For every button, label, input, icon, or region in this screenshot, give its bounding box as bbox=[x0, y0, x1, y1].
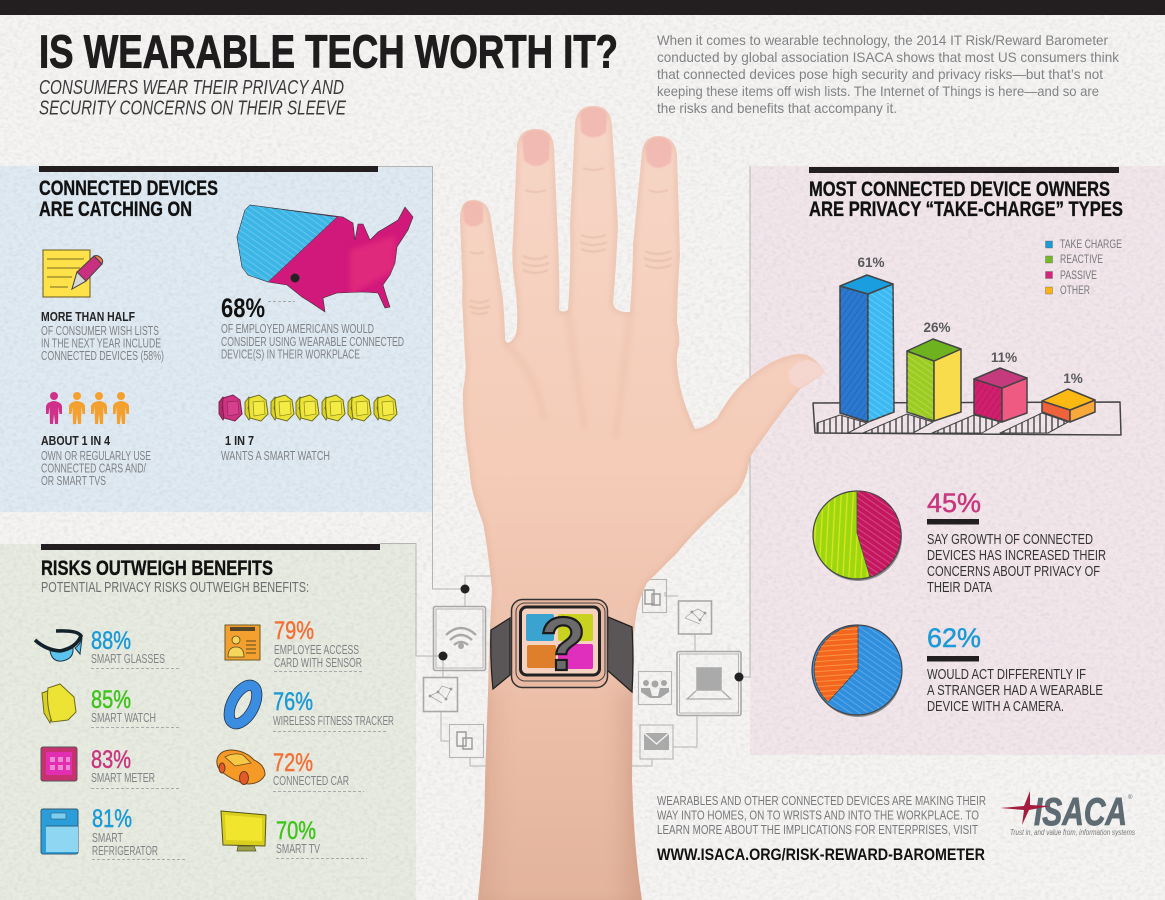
subtitle: SECURITY CONCERNS ON THEIR SLEEVE bbox=[39, 98, 346, 120]
item: wireless fitness tracker: 76% bbox=[273, 688, 313, 716]
icon: documents box bbox=[450, 724, 484, 758]
bar: 1 percent bbox=[1042, 389, 1095, 422]
icon: four people bbox=[46, 392, 129, 424]
text: 62 percent: WOULD ACT DIFFERENTLY IF bbox=[927, 667, 1086, 683]
text: 1 in 7 bbox=[221, 433, 330, 463]
ISACA logo: ISACA bbox=[1034, 791, 1127, 834]
heading: RISKS OUTWEIGH BENEFITS bbox=[41, 557, 273, 580]
watch strap bbox=[491, 617, 633, 692]
intro paragraph: When it comes to wearable technology, the 2014 IT Risk/Reward Barometer bbox=[657, 32, 1108, 48]
item: employee access card bbox=[225, 617, 364, 672]
item: smart TV bbox=[221, 811, 367, 858]
bar labels: 1% bbox=[1063, 371, 1083, 386]
chart legend: OTHER bbox=[1060, 283, 1090, 297]
section rule bbox=[39, 166, 378, 172]
item: connected car: CONNECTED CAR bbox=[273, 774, 349, 788]
bar labels: 61% bbox=[857, 255, 885, 270]
section rule bbox=[41, 544, 380, 550]
text: 62 percent bbox=[927, 623, 1103, 715]
item: smart watch: 85% bbox=[91, 686, 131, 714]
top black bar bbox=[0, 0, 1165, 15]
panel: risks background bbox=[0, 544, 416, 900]
item: smart refrigerator: REFRIGERATOR bbox=[92, 844, 158, 858]
intro paragraph: the risks and benefits that accompany it. bbox=[657, 100, 897, 116]
text: about 1 in 4: OWN OR REGULARLY USE bbox=[41, 449, 151, 463]
text: 45 percent: DEVICES HAS INCREASED THEIR bbox=[927, 548, 1106, 564]
text: 68 percent: CONSIDER USING WEARABLE CONNECTED bbox=[221, 335, 404, 349]
text: about 1 in 4 bbox=[41, 433, 151, 488]
item: smart refrigerator bbox=[41, 805, 186, 860]
pie chart: 45 percent bbox=[813, 491, 902, 581]
heading bbox=[809, 178, 1123, 221]
text: about 1 in 4: OR SMART TVS bbox=[41, 474, 106, 488]
bar: 61 percent bbox=[840, 275, 894, 422]
item: smart glasses: 88% bbox=[91, 627, 131, 655]
icon: laptop box bbox=[677, 652, 741, 716]
fingernails bbox=[463, 107, 825, 388]
item: smart glasses: SMART GLASSES bbox=[91, 652, 165, 666]
item: smart glasses bbox=[35, 627, 181, 668]
heading: ARE CATCHING ON bbox=[39, 198, 192, 221]
item: employee access card: 79% bbox=[274, 617, 314, 645]
bar labels: 11% bbox=[991, 350, 1017, 365]
text: 1 in 7: WANTS A SMART WATCH bbox=[221, 449, 330, 463]
intro paragraph: keeping these items off wish lists. The Internet of Things is here—and so are bbox=[657, 83, 1099, 99]
text: about 1 in 4: CONNECTED CARS AND/ bbox=[41, 462, 146, 476]
title block bbox=[39, 26, 618, 120]
footer text: WEARABLES AND OTHER CONNECTED DEVICES ARE MAKING THEIR bbox=[657, 793, 986, 808]
url: WWW.ISACA.ORG/RISK-REWARD-BAROMETER bbox=[657, 845, 985, 864]
text: 45 percent bbox=[927, 488, 1106, 596]
text: more than half: MORE THAN HALF bbox=[41, 309, 135, 324]
ISACA logo: ® bbox=[1128, 794, 1133, 801]
bar: 26 percent bbox=[907, 339, 961, 421]
chart legend: REACTIVE bbox=[1060, 252, 1103, 266]
bar labels bbox=[857, 255, 1083, 386]
illustration: smart watch with question mark bbox=[491, 600, 633, 692]
connector diagram and device boxes bbox=[378, 166, 750, 766]
intro paragraph: conducted by global association ISACA shows that most US consumers think bbox=[657, 49, 1120, 65]
intro paragraph: that connected devices pose high security and privacy risks—but that’s not bbox=[657, 66, 1103, 82]
panel: connected devices bbox=[39, 166, 413, 488]
bar: 11 percent bbox=[974, 368, 1027, 422]
item: wireless fitness tracker bbox=[223, 681, 394, 732]
ISACA logo bbox=[1000, 791, 1135, 837]
footer text: LEARN MORE ABOUT THE IMPLICATIONS FOR ENTERPRISES, VISIT bbox=[657, 822, 978, 837]
text: 45 percent: SAY GROWTH OF CONNECTED bbox=[927, 532, 1093, 548]
item: smart refrigerator: 81% bbox=[92, 805, 132, 833]
question mark: ? bbox=[540, 602, 586, 687]
item: smart TV: 70% bbox=[276, 817, 316, 845]
icon: note and pencil bbox=[43, 250, 103, 297]
pie chart: 62 percent bbox=[812, 625, 902, 717]
text: more than half: CONNECTED DEVICES (58%) bbox=[41, 349, 164, 363]
subtitle bbox=[39, 77, 346, 120]
item: smart refrigerator: SMART bbox=[92, 831, 123, 845]
item: smart meter: SMART METER bbox=[91, 771, 155, 785]
icon: mail box bbox=[640, 725, 673, 759]
knuckle creases bbox=[469, 168, 672, 314]
icon: wifi box bbox=[434, 606, 486, 670]
text: about 1 in 4: ABOUT 1 IN 4 bbox=[41, 433, 111, 448]
text: 62 percent: A STRANGER HAD A WEARABLE bbox=[927, 683, 1103, 699]
icon: chat box bbox=[642, 580, 666, 612]
chart legend: TAKE CHARGE bbox=[1060, 237, 1122, 251]
connector dots bbox=[438, 584, 744, 682]
section rule bbox=[809, 167, 1119, 173]
item: smart TV: SMART TV bbox=[276, 842, 320, 856]
panel: privacy take-charge types bbox=[809, 167, 1123, 717]
footer text: WAY INTO HOMES, ON TO WRISTS AND INTO THE WORKPLACE. TO bbox=[657, 808, 979, 822]
subheading: POTENTIAL PRIVACY RISKS OUTWEIGH BENEFITS: bbox=[41, 579, 309, 596]
panel: risks outweigh benefits bbox=[35, 544, 394, 860]
icon: US map bbox=[237, 205, 413, 312]
watch case bbox=[512, 600, 608, 688]
intro paragraph bbox=[657, 32, 1120, 116]
heading bbox=[39, 177, 218, 221]
icon: seven watches bbox=[219, 395, 397, 421]
item: smart watch: SMART WATCH bbox=[91, 711, 156, 725]
footer text bbox=[657, 793, 986, 864]
text: 62 percent: DEVICE WITH A CAMERA. bbox=[927, 699, 1064, 715]
text: 45 percent: CONCERNS ABOUT PRIVACY OF bbox=[927, 564, 1100, 580]
item: smart meter: 83% bbox=[91, 746, 131, 774]
item: employee access card: CARD WITH SENSOR bbox=[274, 656, 362, 670]
text: more than half: OF CONSUMER WISH LISTS bbox=[41, 324, 159, 338]
title: IS WEARABLE TECH WORTH IT? bbox=[39, 26, 618, 78]
panel: privacy types background bbox=[750, 166, 1165, 755]
subtitle: CONSUMERS WEAR THEIR PRIVACY AND bbox=[39, 77, 344, 99]
ISACA logo: Trust in, and value from, information systems bbox=[1010, 828, 1135, 837]
text: 45 percent: THEIR DATA bbox=[927, 580, 992, 596]
text: more than half: IN THE NEXT YEAR INCLUDE bbox=[41, 336, 161, 350]
3D bar chart bbox=[813, 275, 1121, 435]
icon: network box right bbox=[678, 601, 712, 634]
item: wireless fitness tracker: WIRELESS FITNESS TRACKER bbox=[273, 714, 394, 728]
text: 1 in 7: 1 IN 7 bbox=[225, 433, 254, 448]
text: 68 percent: DEVICE(S) IN THEIR WORKPLACE bbox=[221, 348, 360, 362]
bar labels: 26% bbox=[923, 320, 951, 335]
illustration: hand bbox=[460, 106, 825, 900]
panel: connected devices background bbox=[0, 166, 433, 512]
watch screen quadrants bbox=[526, 614, 593, 669]
text: more than half bbox=[41, 309, 164, 363]
text: 62 percent: 62% bbox=[927, 623, 981, 653]
text: 68 percent: 68% bbox=[221, 293, 265, 323]
text: 68 percent bbox=[221, 293, 404, 362]
text: 45 percent: 45% bbox=[927, 488, 981, 518]
item: smart watch bbox=[42, 684, 181, 728]
icon: people box bbox=[638, 672, 672, 704]
item: connected car: 72% bbox=[273, 749, 313, 777]
chart legend bbox=[1046, 237, 1122, 297]
heading: CONNECTED DEVICES bbox=[39, 177, 218, 200]
item: smart meter bbox=[41, 746, 181, 788]
item: connected car bbox=[217, 749, 364, 792]
item: employee access card: EMPLOYEE ACCESS bbox=[274, 643, 359, 657]
text: 68 percent: OF EMPLOYED AMERICANS WOULD bbox=[221, 322, 374, 336]
chart legend: PASSIVE bbox=[1060, 268, 1097, 282]
icon: network box bbox=[424, 678, 458, 712]
